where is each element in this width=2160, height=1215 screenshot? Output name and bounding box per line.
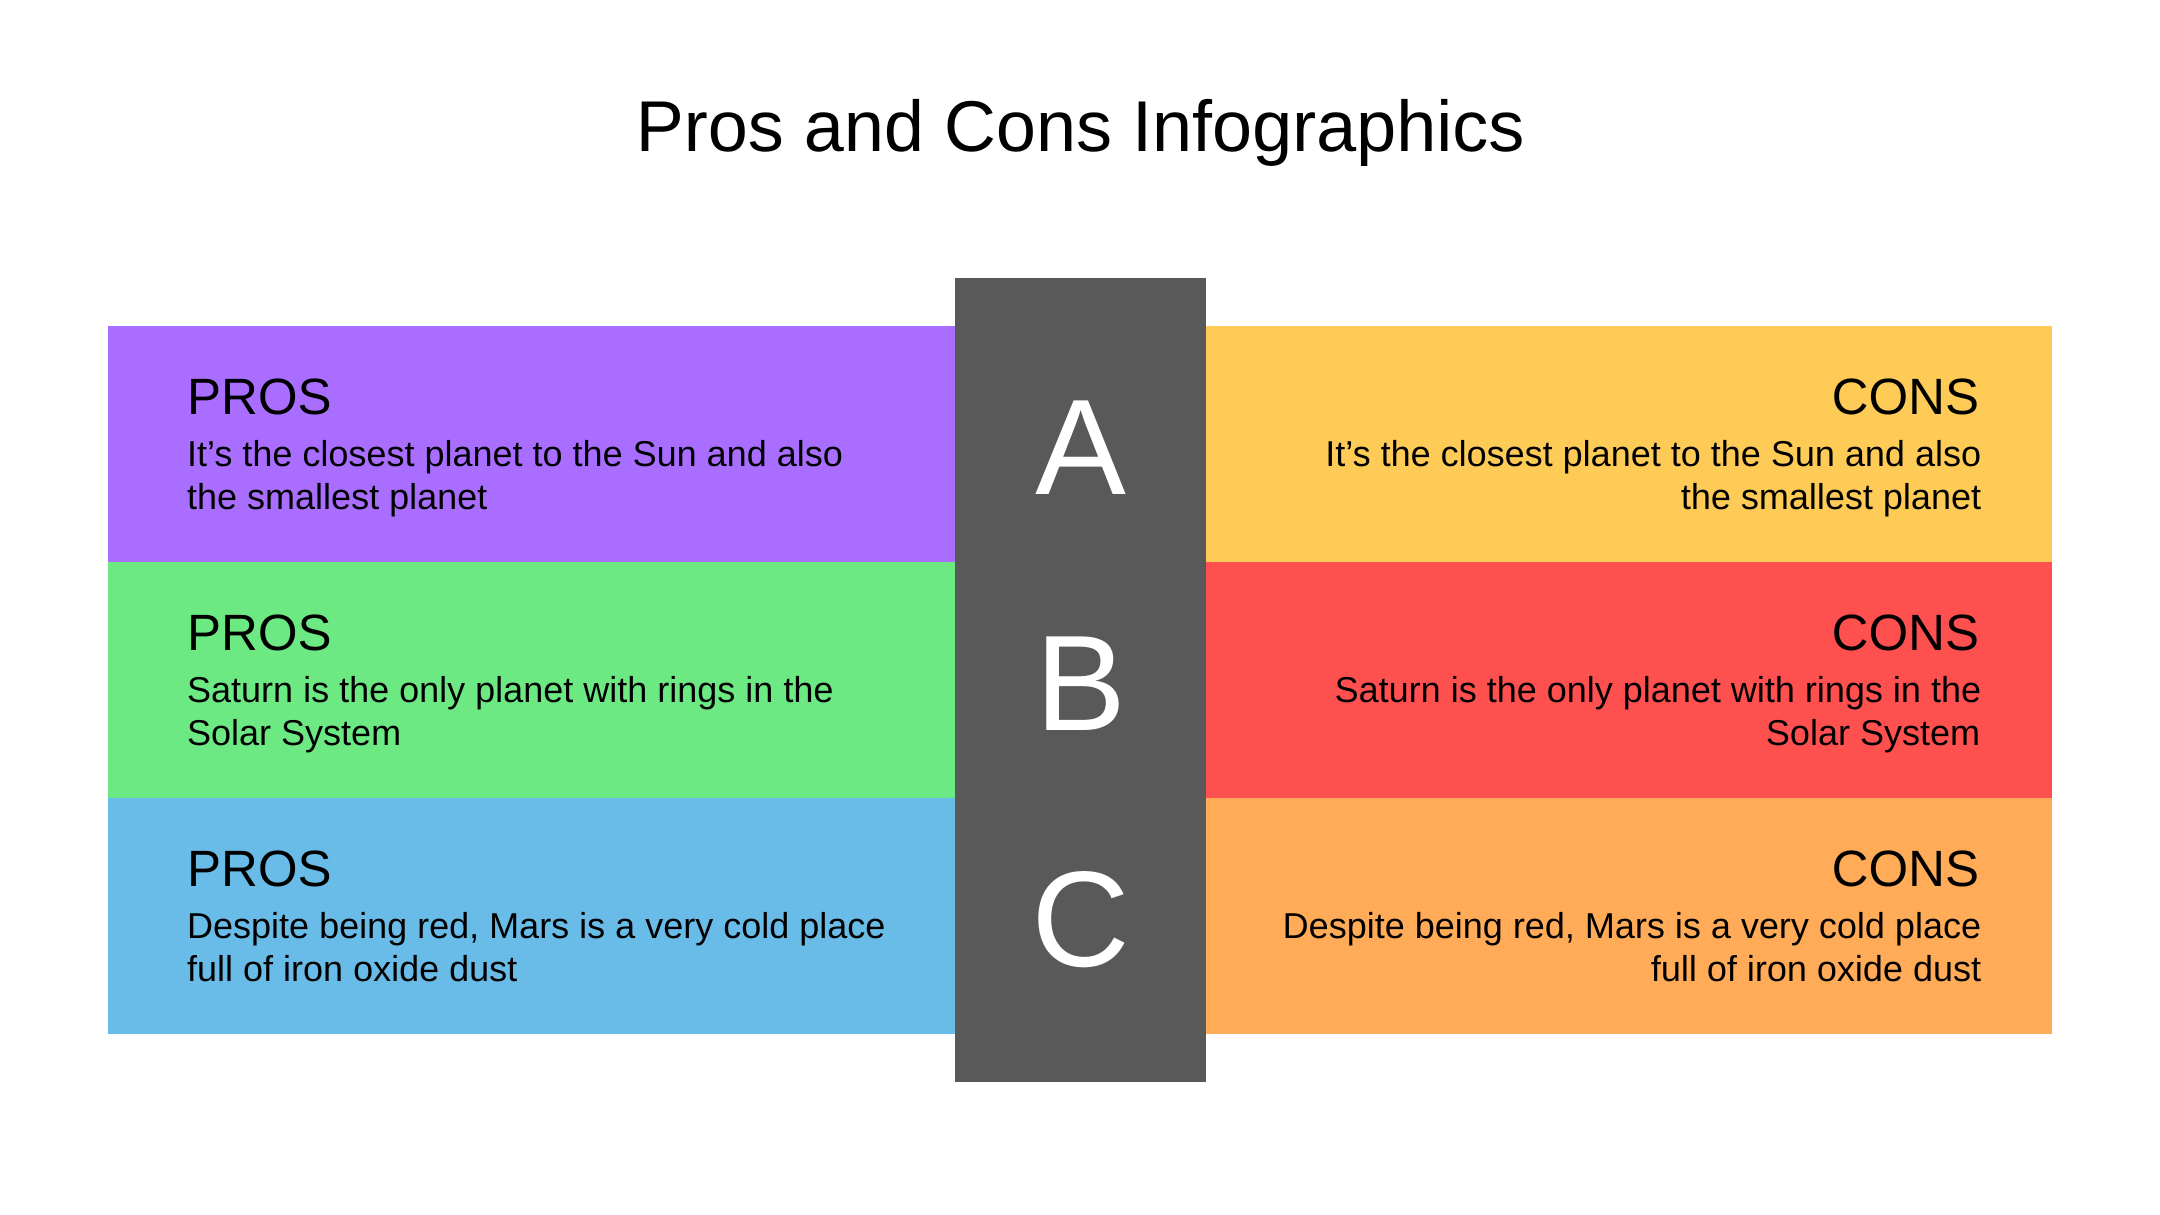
panel: pros A: It’s the closest planet to the Sun and also — [187, 433, 843, 474]
panel: cons A: It’s the closest planet to the Sun and also — [1325, 433, 1981, 474]
panel: pros C: PROS — [187, 840, 332, 897]
panel: pros C — [108, 798, 956, 1034]
panel: cons C — [1206, 798, 2052, 1034]
panel: cons B — [1206, 562, 2052, 798]
panel: pros B — [108, 562, 956, 798]
title: Pros and Cons Infographics — [636, 87, 1524, 167]
center column — [955, 278, 1206, 1082]
panel: cons C: CONS — [1832, 840, 1979, 897]
letter C: C — [1031, 843, 1130, 995]
panel: cons A: the smallest planet — [1681, 476, 1981, 517]
panel: cons B: Solar System — [1766, 712, 1980, 753]
panel: cons B: Saturn is the only planet with rings in the — [1335, 669, 1981, 710]
panel: cons A: CONS — [1832, 368, 1979, 425]
panel: cons C: full of iron oxide dust — [1651, 948, 1981, 989]
panel: pros C: full of iron oxide dust — [187, 948, 517, 989]
panel: pros A: PROS — [187, 368, 332, 425]
panel: cons B: CONS — [1832, 604, 1979, 661]
panel: pros B: Saturn is the only planet with rings in the — [187, 669, 833, 710]
letter A: A — [1035, 371, 1126, 523]
panel: pros B: PROS — [187, 604, 332, 661]
letter B: B — [1035, 607, 1126, 759]
panel: pros C: Despite being red, Mars is a very cold place — [187, 905, 885, 946]
panel: pros A: the smallest planet — [187, 476, 487, 517]
panel: cons A — [1206, 326, 2052, 562]
panel: cons C: Despite being red, Mars is a very cold place — [1283, 905, 1981, 946]
panel: pros A — [108, 326, 956, 562]
panel: pros B: Solar System — [187, 712, 401, 753]
